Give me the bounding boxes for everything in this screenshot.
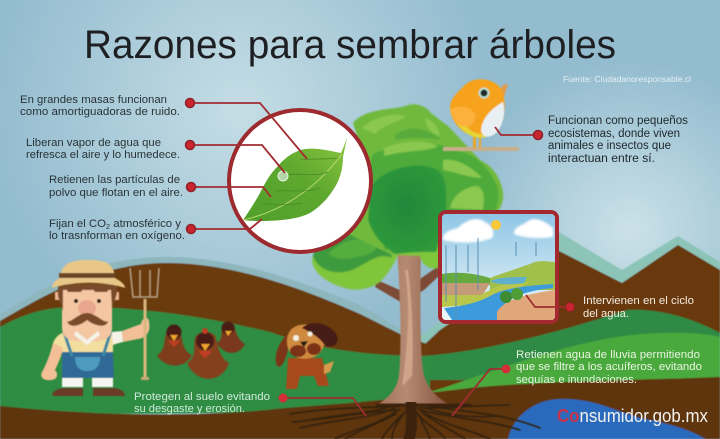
bush — [500, 291, 512, 303]
face — [62, 284, 112, 342]
water — [508, 399, 705, 439]
text: erosion — [134, 391, 270, 415]
text: water vapor: Liberan vapor de agua que — [26, 137, 161, 149]
right mountains brown — [424, 245, 720, 400]
text: ecosystems: Funcionan como pequeños — [548, 115, 688, 127]
text: dust: Retienen las partículas de — [49, 174, 180, 186]
panel: water cycle — [440, 212, 557, 322]
bird connector — [495, 127, 542, 140]
text: aquifers: sequías e inundaciones. — [516, 374, 637, 386]
connector lines: left labels — [190, 103, 307, 229]
ears — [55, 292, 119, 300]
trunk — [377, 250, 450, 405]
text: CO2: Fijan el CO — [49, 218, 104, 230]
foliage mid layer — [368, 144, 498, 250]
icon: leaf — [243, 138, 347, 221]
boots — [52, 388, 125, 396]
text: ecosystems: animales e insectos que — [548, 140, 671, 152]
text: dust — [49, 174, 183, 199]
dark green band right — [370, 310, 720, 380]
text: ecosystems: ecosistemas, donde viven — [548, 128, 680, 140]
text: ecosystems: interactuan entre sí. — [548, 153, 655, 165]
far hills — [490, 261, 555, 290]
text: aquifers — [516, 349, 702, 386]
title: Razones para sembrar árboles — [84, 23, 616, 67]
sleeve — [112, 331, 123, 344]
foliage light patches — [362, 115, 484, 210]
text: water vapor: refresca el aire y lo humedece. — [26, 149, 180, 161]
overalls — [62, 352, 114, 378]
arrows — [446, 238, 536, 320]
text: noise: como amortiguadoras de ruido. — [20, 106, 180, 118]
text: aquifers: que se filtre a los acuíferos, evitando — [516, 361, 702, 373]
left field green — [0, 307, 430, 414]
right arm — [122, 318, 149, 342]
perch — [443, 147, 519, 151]
clouds — [443, 219, 553, 242]
foliage lime lower — [312, 220, 442, 290]
sun — [491, 220, 501, 230]
connector dots: left labels — [186, 98, 196, 234]
lake — [490, 277, 527, 284]
text: erosion: su desgaste y erosión. — [134, 403, 245, 415]
peach bank — [497, 290, 555, 320]
text: water cycle: del agua. — [583, 308, 629, 320]
logo text: Consumidor.gob.mx — [557, 406, 708, 426]
chicken center — [187, 328, 229, 379]
text: CO2: 2 — [106, 224, 110, 231]
chicken right — [217, 322, 245, 353]
text: water vapor — [26, 137, 180, 161]
text: erosion: Protegen al suelo evitando — [134, 391, 270, 403]
hat — [52, 260, 125, 288]
foliage upper base — [340, 104, 503, 255]
foliage — [312, 104, 503, 290]
landscape hills — [0, 231, 720, 439]
soil connectors — [278, 364, 510, 416]
text: dust: polvo que flotan en el aire. — [49, 187, 183, 199]
dog — [276, 323, 338, 389]
text: water cycle — [583, 295, 694, 320]
bottom soil — [0, 377, 720, 439]
shirt — [53, 332, 122, 353]
text: ecosystems — [548, 115, 688, 165]
text: CO2 — [49, 218, 185, 242]
foliage lower dark lump — [313, 222, 392, 272]
source note: Fuente: Ciudadanoresponsable.cl — [563, 75, 691, 84]
foliage dark core — [368, 166, 446, 254]
right mountains teal rim — [400, 231, 720, 400]
brown strata — [442, 283, 490, 296]
callout: leaf circle — [229, 110, 371, 252]
text: noise: En grandes masas funcionan — [20, 94, 167, 106]
light green band — [427, 333, 720, 393]
moustache — [67, 313, 108, 326]
text: CO2: atmosférico y — [110, 218, 182, 230]
river — [444, 284, 553, 320]
text: aquifers: Retienen agua de lluvia permitiendo — [516, 349, 700, 361]
text: CO2: lo trasnforman en oxígeno. — [49, 230, 185, 242]
farmer — [41, 260, 159, 396]
left hill teal rim — [0, 257, 412, 350]
left hill brown — [0, 263, 430, 380]
icon: bird — [443, 79, 519, 151]
left arm — [41, 343, 63, 380]
chickens — [157, 322, 245, 379]
collar — [74, 331, 100, 345]
tree — [312, 104, 503, 405]
roots — [290, 404, 540, 439]
pitchfork — [130, 268, 159, 380]
yellow-green field — [442, 282, 530, 307]
water cycle connector — [526, 295, 574, 312]
text: noise — [20, 94, 180, 118]
text: water cycle: Intervienen en el ciclo — [583, 295, 694, 307]
branches — [375, 280, 404, 304]
hair — [58, 284, 117, 311]
chicken left — [157, 324, 192, 366]
